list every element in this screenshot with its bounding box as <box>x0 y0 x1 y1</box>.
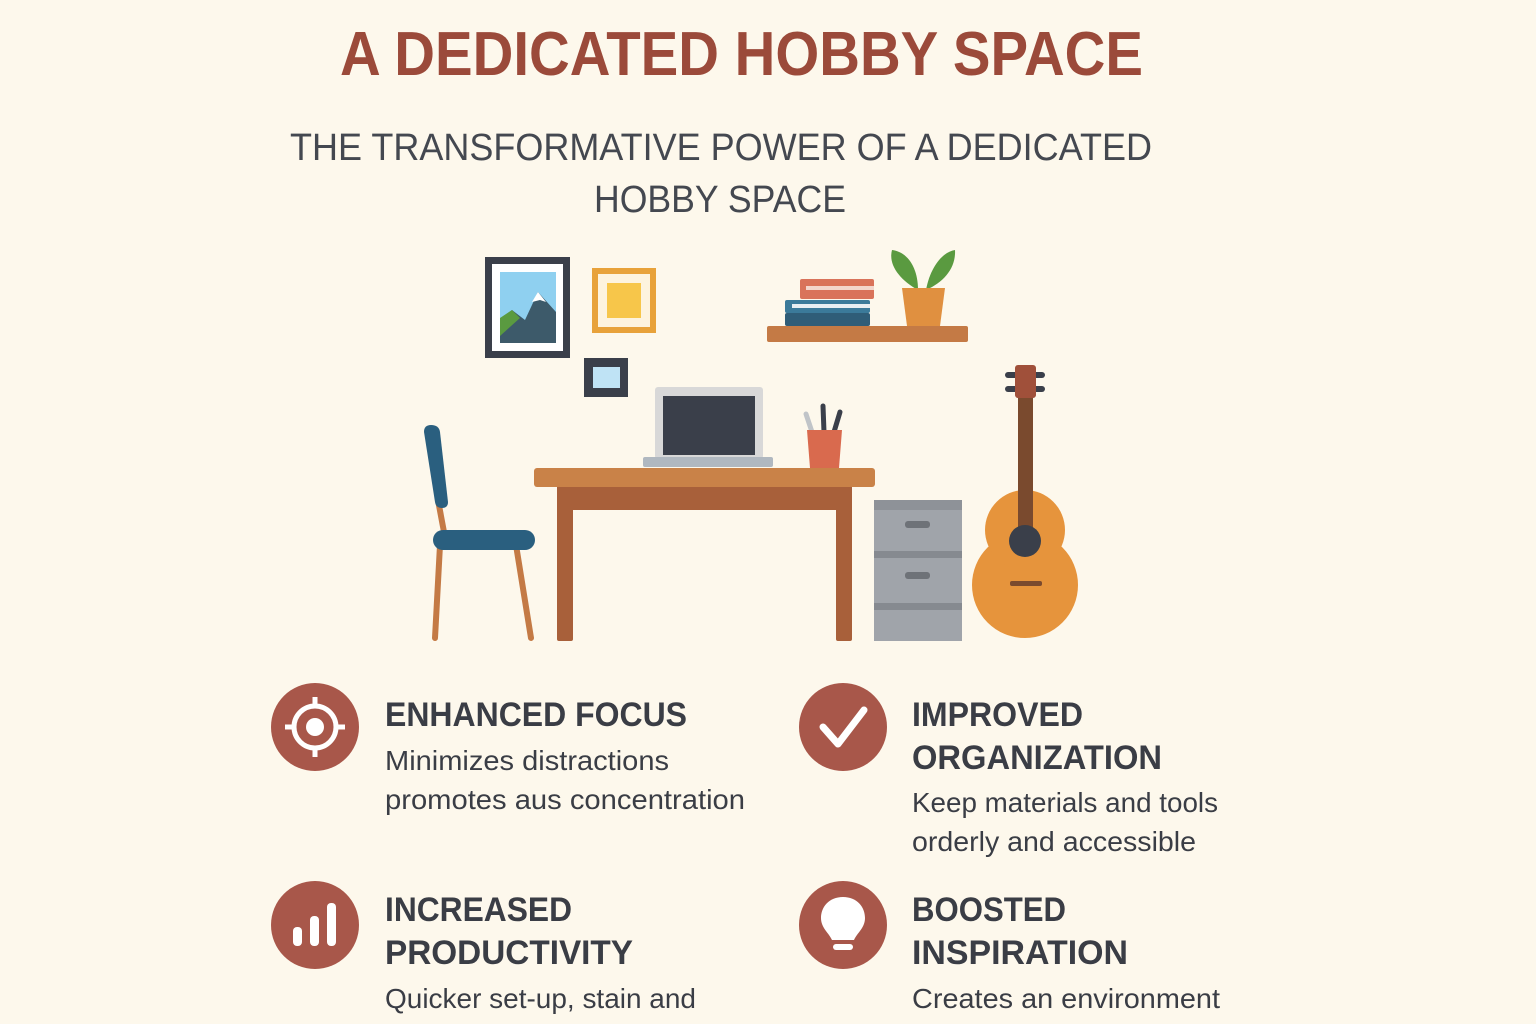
feature: enhanced focus: ENHANCED FOCUS <box>385 696 687 734</box>
feature: boosted inspiration: Creates an environment <box>912 983 1220 1014</box>
feature: boosted inspiration <box>799 881 1220 1014</box>
filing cabinet <box>874 500 962 641</box>
shelf with books and plant <box>767 250 968 342</box>
feature: increased productivity: PRODUCTIVITY <box>385 934 633 972</box>
icon: orange frame <box>592 268 656 333</box>
feature: improved organization: orderly and accessible <box>912 826 1196 857</box>
guitar <box>972 365 1078 638</box>
icon: mountain picture frame <box>485 257 570 358</box>
laptop <box>643 387 773 467</box>
icon: target <box>271 683 359 771</box>
chair <box>424 425 535 638</box>
icon: checkmark <box>799 683 887 771</box>
feature: enhanced focus: Minimizes distractions <box>385 745 669 776</box>
feature: improved organization <box>799 683 1218 857</box>
subtitle: HOBBY SPACE <box>594 179 846 221</box>
subtitle <box>290 127 1152 221</box>
feature: boosted inspiration: INSPIRATION <box>912 934 1128 972</box>
feature: increased productivity: INCREASED <box>385 891 572 929</box>
illustration: hobby room <box>424 250 1078 641</box>
feature: enhanced focus <box>271 683 745 815</box>
feature: increased productivity: Quicker set-up, stain and <box>385 983 696 1014</box>
subtitle: THE TRANSFORMATIVE POWER OF A DEDICATED <box>290 127 1152 169</box>
feature: enhanced focus: promotes aus concentration <box>385 784 745 815</box>
feature: boosted inspiration: BOOSTED <box>912 891 1066 929</box>
title: A DEDICATED HOBBY SPACE <box>340 20 1143 89</box>
feature: improved organization: IMPROVED <box>912 696 1083 734</box>
feature: increased productivity <box>271 881 696 1014</box>
icon: small frame <box>584 358 628 397</box>
feature: improved organization: ORGANIZATION <box>912 739 1162 777</box>
feature: improved organization: Keep materials and tools <box>912 787 1218 818</box>
pen cup <box>806 406 842 468</box>
icon: lightbulb <box>799 881 887 969</box>
icon: bar chart <box>271 881 359 969</box>
desk <box>534 468 875 641</box>
